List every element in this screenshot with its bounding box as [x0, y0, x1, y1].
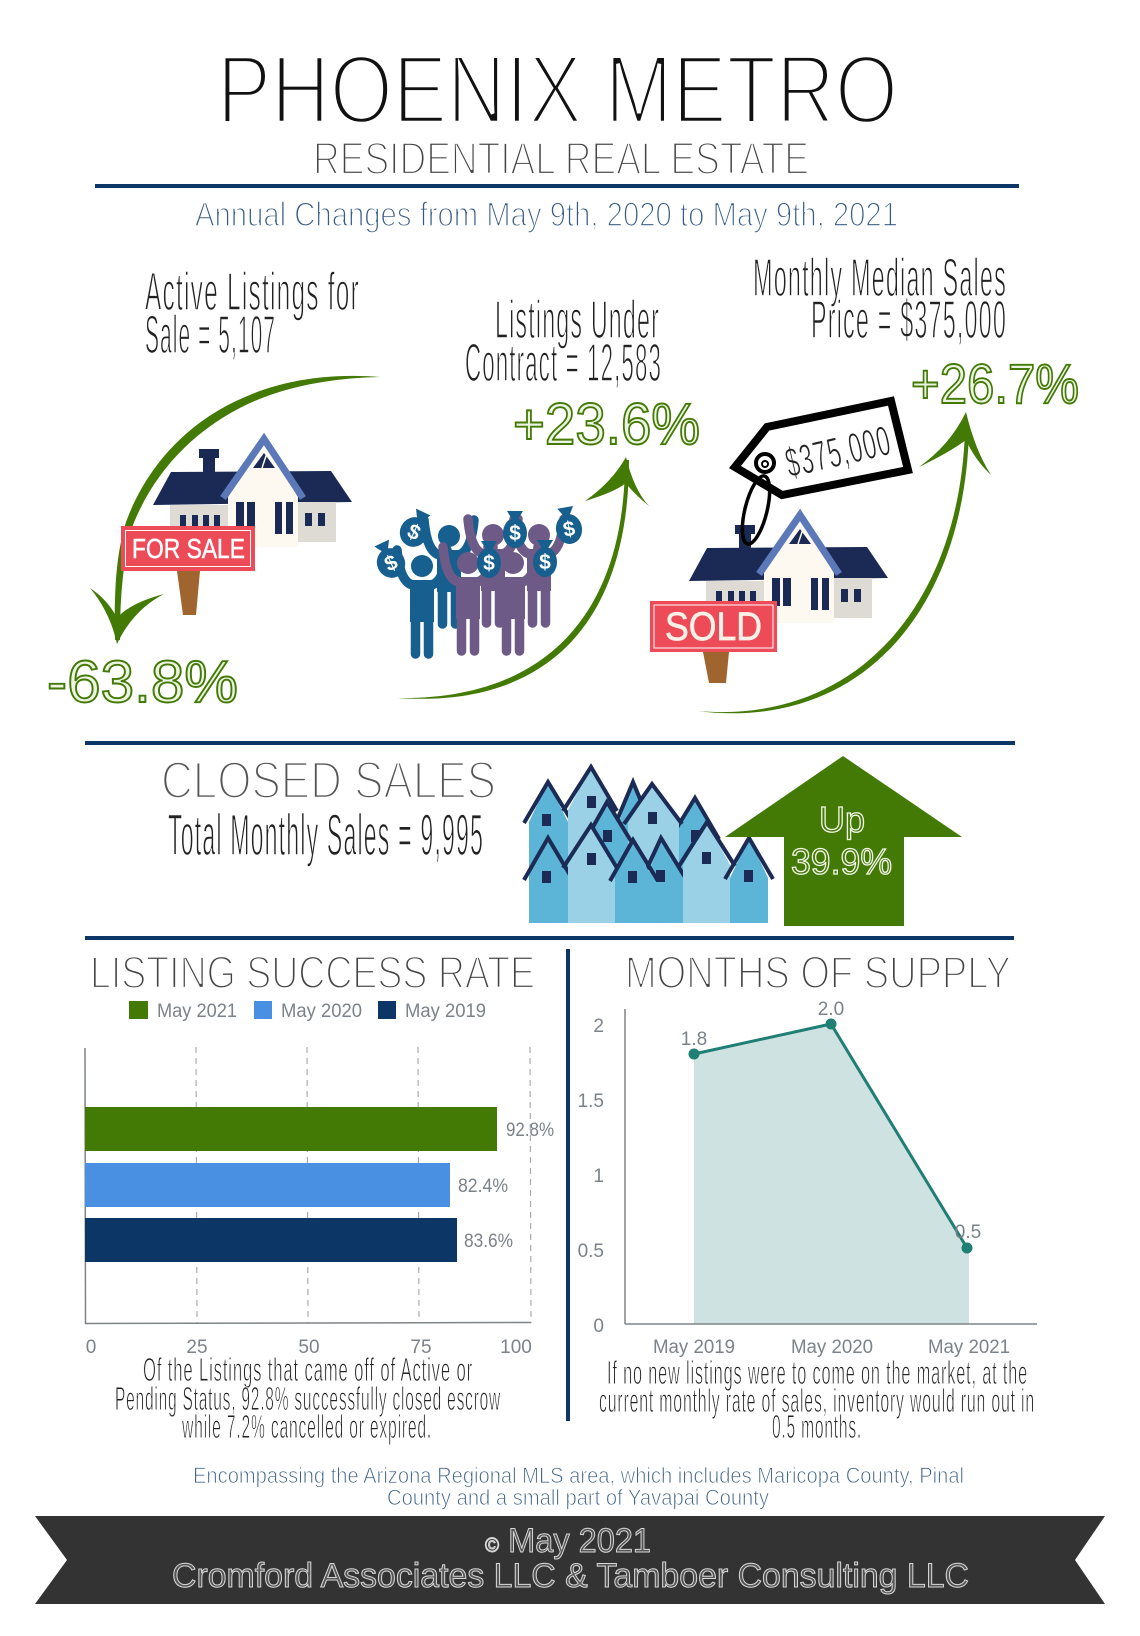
heading: active listings: Sale = 5,107	[145, 305, 276, 365]
text: coverage note	[193, 1463, 964, 1510]
subtitle: RESIDENTIAL REAL ESTATE	[313, 133, 809, 184]
icon: people with money bags: $	[509, 522, 521, 545]
text: Contract = 12,583	[465, 333, 662, 393]
arrow: down	[90, 376, 380, 644]
company names: Cromford Associates LLC & Tamboer Consulting LLC	[172, 1557, 969, 1595]
icon: house sold	[689, 515, 888, 623]
x axis labels: 100	[500, 1337, 532, 1358]
x axis labels: 50	[298, 1337, 320, 1358]
area chart	[578, 999, 1037, 1358]
bar: May 2020	[85, 1163, 450, 1207]
bar value labels	[458, 1120, 554, 1252]
icon: sold sign	[650, 601, 777, 683]
panel: active listings	[47, 262, 380, 715]
arrow: up 39.9%: 39.9%	[791, 841, 892, 882]
x axis labels	[653, 1337, 1010, 1358]
panel: listing success rate	[85, 947, 554, 1445]
y axis labels: 0	[593, 1316, 604, 1337]
arrow: up	[398, 457, 649, 699]
legend: May 2020	[281, 1001, 362, 1022]
icon: sold sign: SOLD	[665, 605, 762, 649]
panel: closed sales	[161, 752, 962, 926]
bar: May 2019	[85, 1218, 457, 1262]
copyright date: © May 2021	[485, 1522, 651, 1560]
text: coverage note: County and a small part of Yavapai County	[387, 1485, 769, 1510]
icon: for sale sign: FOR SALE	[132, 533, 245, 564]
text: listing success note	[115, 1351, 501, 1445]
y axis labels: 0.5	[578, 1241, 604, 1262]
panel: listing success rate: Pending Status, 92.8% successfully closed escrow	[115, 1380, 501, 1417]
text: listing success note: while 7.2% cancelled or expired.	[182, 1408, 432, 1445]
icon: people with money bags: $	[539, 551, 551, 574]
text: coverage note: Encompassing the Arizona Regional MLS area, which includes Maricopa County, Pinal	[193, 1463, 964, 1488]
bar value labels: 82.4%	[458, 1176, 508, 1197]
arrow: up 39.9%: Up	[819, 799, 865, 840]
legend: May 2021	[157, 1001, 237, 1022]
panel: listings under contract	[369, 290, 700, 699]
heading: median sales price	[753, 248, 1007, 350]
text: months of supply note: 0.5 months.	[772, 1408, 862, 1445]
icon: people with money bags: $	[381, 550, 402, 576]
x axis labels: May 2021	[928, 1337, 1010, 1358]
heading: listings under contract	[465, 290, 662, 393]
icon: house	[153, 439, 352, 547]
arrow: up	[697, 412, 991, 713]
stat: +23.6%: +23.6%	[513, 392, 700, 457]
icon: neighborhood of houses	[524, 767, 773, 923]
text: listing success note: Of the Listings that came off of Active or	[143, 1351, 473, 1388]
y axis labels: 1.5	[578, 1091, 604, 1112]
y axis labels: 1	[593, 1166, 604, 1187]
icon: people with money bags: $	[483, 552, 495, 575]
y axis labels: 2	[593, 1016, 604, 1037]
header	[95, 35, 1019, 234]
stat: +26.7%: +26.7%	[911, 352, 1079, 415]
data labels: 0.5	[955, 1222, 981, 1243]
legend: May 2019	[405, 1001, 486, 1022]
text: Active Listings for	[145, 262, 360, 322]
data labels	[681, 999, 981, 1243]
x axis labels: 75	[410, 1337, 432, 1358]
x axis labels: 25	[186, 1337, 208, 1358]
data labels: 1.8	[681, 1029, 707, 1050]
legend	[129, 1001, 486, 1022]
bar: May 2021	[85, 1107, 497, 1151]
footer ribbon	[35, 1516, 1105, 1604]
icon: price tag: $375,000	[781, 416, 896, 486]
bar value labels: 83.6%	[464, 1231, 513, 1252]
icon: people with money bags	[369, 505, 584, 654]
heading: active listings	[145, 262, 360, 365]
title: PHOENIX METRO	[217, 35, 898, 144]
icon: for sale sign	[121, 526, 255, 615]
panel: closed sales: Total Monthly Sales = 9,995	[168, 803, 484, 868]
heading: closed sales: CLOSED SALES	[161, 752, 496, 810]
bar value labels: 92.8%	[506, 1120, 554, 1141]
panel: monthly median sales price	[650, 248, 1079, 713]
icon: people with money bags: $	[561, 517, 577, 542]
x axis labels	[86, 1337, 532, 1358]
x axis labels: May 2020	[791, 1337, 873, 1358]
arrow: up 39.9%	[725, 756, 962, 926]
bar chart	[85, 1047, 554, 1358]
panel: listings under contract: Listings Under	[495, 290, 660, 350]
data labels: 2.0	[818, 999, 844, 1020]
heading: listing success rate: LISTING SUCCESS RATE	[90, 947, 535, 998]
stat: -63.8%: -63.8%	[47, 649, 238, 715]
heading: months of supply: MONTHS OF SUPPLY	[625, 947, 1011, 998]
panel: months of supply	[578, 947, 1037, 1445]
icon: people with money bags: $	[404, 520, 424, 545]
icon: price tag	[735, 401, 908, 547]
y axis labels	[578, 1016, 604, 1337]
x axis labels: May 2019	[653, 1337, 735, 1358]
text: months of supply note	[599, 1354, 1035, 1445]
date range subheading: Annual Changes from May 9th, 2020 to May 9th, 2021	[195, 196, 898, 234]
x axis labels: 0	[86, 1337, 96, 1358]
